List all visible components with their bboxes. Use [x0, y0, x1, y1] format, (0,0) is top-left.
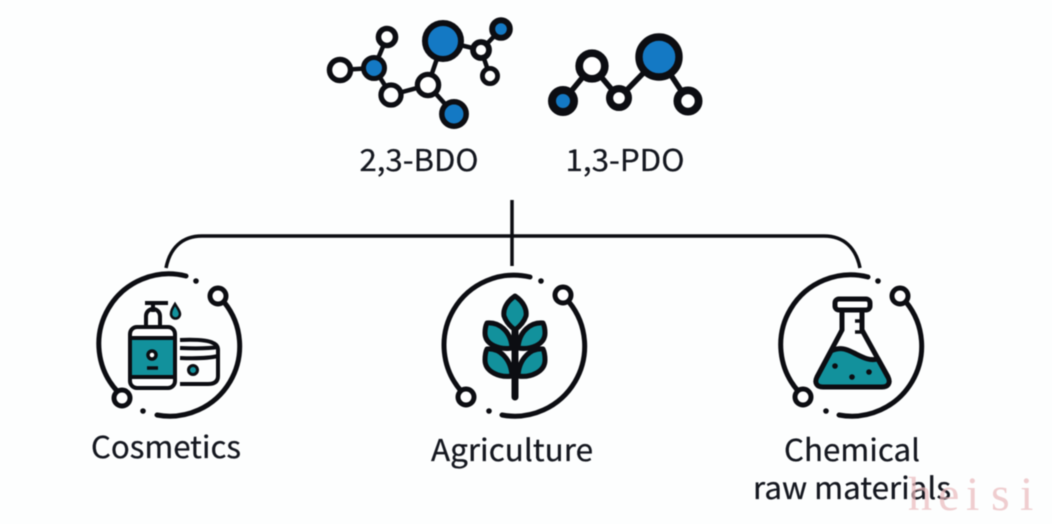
connector tree [166, 200, 860, 268]
icon ring: chemical [781, 275, 922, 416]
icon: flask [816, 299, 889, 387]
panel: cosmetics [99, 274, 240, 416]
icon ring: agriculture [444, 275, 585, 416]
label: 2,3-BDO: 2,3-BDO [360, 136, 478, 180]
icon: wheat [485, 296, 545, 397]
icon: bottle and jar [130, 303, 218, 388]
watermark: heisi [908, 468, 1033, 521]
label: Chemical raw materials: raw materials [753, 464, 951, 508]
molecule: 1,3-PDO [552, 37, 699, 112]
label: Agriculture: Agriculture [431, 426, 593, 470]
label: Chemical raw materials: Chemical [784, 426, 920, 470]
label: 1,3-PDO: 1,3-PDO [566, 136, 684, 180]
molecule: 2,3-BDO [330, 20, 510, 126]
panel: agriculture [444, 275, 585, 416]
label: Chemical raw materials [753, 426, 951, 508]
label: Cosmetics: Cosmetics [91, 423, 241, 467]
icon ring: cosmetics [99, 274, 240, 416]
panel: chemical raw materials [781, 275, 922, 416]
